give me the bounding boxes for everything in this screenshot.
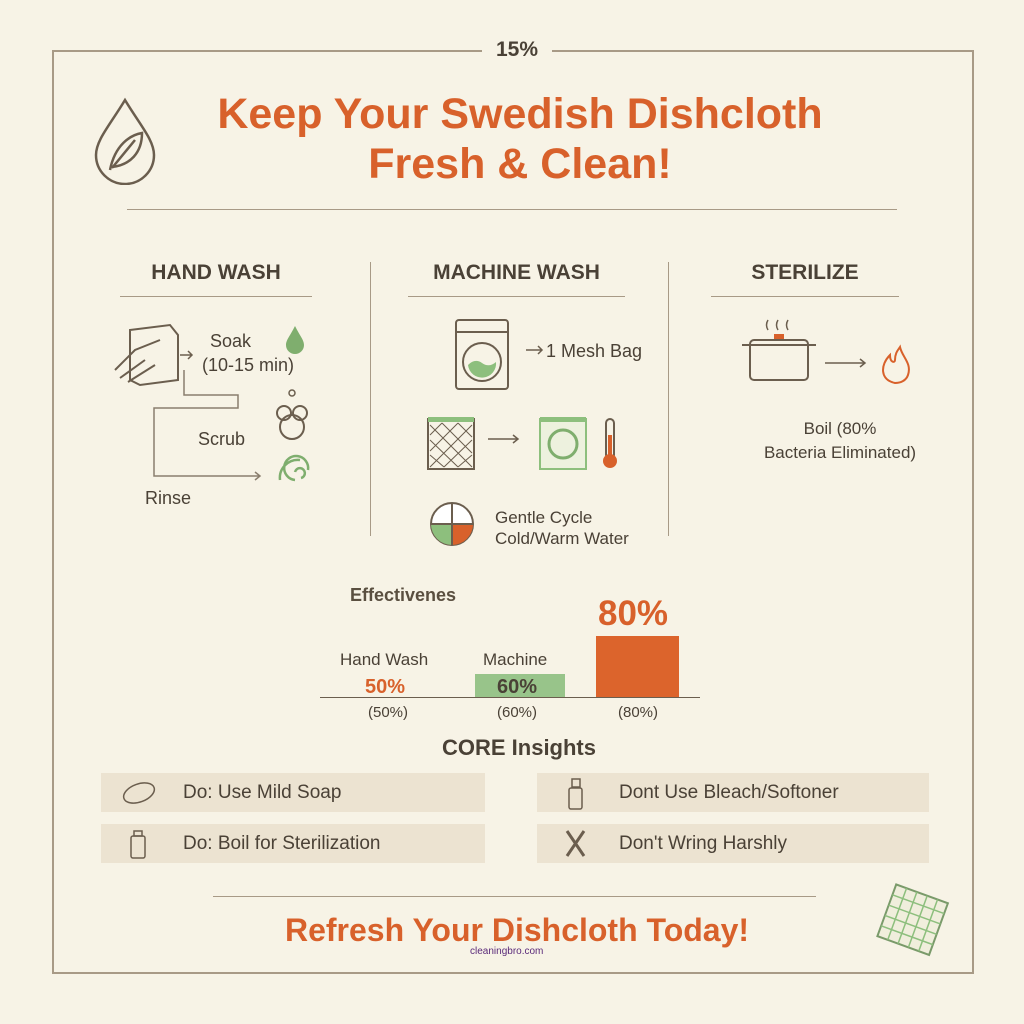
panel: sterilize <box>742 320 916 462</box>
tip: mild soap <box>101 773 485 812</box>
panel: hand wash steps: Scrub <box>198 429 245 449</box>
bar chart: effectiveness: 50% <box>365 676 405 698</box>
bar chart: effectiveness: 80% <box>598 594 668 633</box>
panel: machine wash steps <box>427 319 642 548</box>
bar chart: effectiveness <box>320 585 700 721</box>
heading: hand wash: HAND WASH <box>151 261 281 284</box>
panel: machine wash steps: 1 Mesh Bag <box>546 341 642 361</box>
tip: boil: Do: Boil for Sterilization <box>183 833 380 854</box>
tip: boil <box>101 824 485 863</box>
title <box>217 90 823 188</box>
title: Fresh & Clean! <box>368 140 672 188</box>
watermark: cleaningbro.com <box>470 946 543 957</box>
panel: machine wash steps: Cold/Warm Water <box>495 529 629 548</box>
bar chart: effectiveness: (80%) <box>618 704 658 721</box>
bar chart: effectiveness: Machine <box>483 650 547 669</box>
panel: hand wash steps: Soak <box>210 331 251 351</box>
panel: hand wash steps: (10-15 min) <box>202 355 294 375</box>
tip: no bleach <box>537 773 929 812</box>
bar chart: effectiveness: 60% <box>497 676 537 698</box>
heading: core insights: CORE Insights <box>442 735 596 760</box>
panel: hand wash steps: Rinse <box>145 488 191 508</box>
heading: sterilize: STERILIZE <box>751 261 859 284</box>
tip: no bleach: Dont Use Bleach/Softoner <box>619 782 839 803</box>
panel: hand wash steps <box>114 324 310 508</box>
icon: dishcloth <box>876 883 950 956</box>
panel: sterilize: Bacteria Eliminated) <box>764 443 916 462</box>
panel: sterilize: Boil (80% <box>804 419 876 438</box>
heading: machine wash: MACHINE WASH <box>433 261 600 284</box>
tip: don't wring <box>537 824 929 863</box>
badge: 15% <box>482 38 552 62</box>
bar chart: effectiveness: Hand Wash <box>340 650 428 669</box>
tip: don't wring: Don't Wring Harshly <box>619 833 787 854</box>
footer call to action: Refresh Your Dishcloth Today! <box>285 912 749 948</box>
title: Keep Your Swedish Dishcloth <box>217 90 823 138</box>
icon: leaf drop <box>94 98 156 185</box>
badge: 15%: 15% <box>496 38 538 61</box>
bar chart: effectiveness: (50%) <box>368 704 408 721</box>
bar chart: effectiveness: (60%) <box>497 704 537 721</box>
tip: mild soap: Do: Use Mild Soap <box>183 782 341 803</box>
panel: machine wash steps: Gentle Cycle <box>495 508 592 527</box>
bar chart: effectiveness: Effectivenes <box>350 585 456 605</box>
